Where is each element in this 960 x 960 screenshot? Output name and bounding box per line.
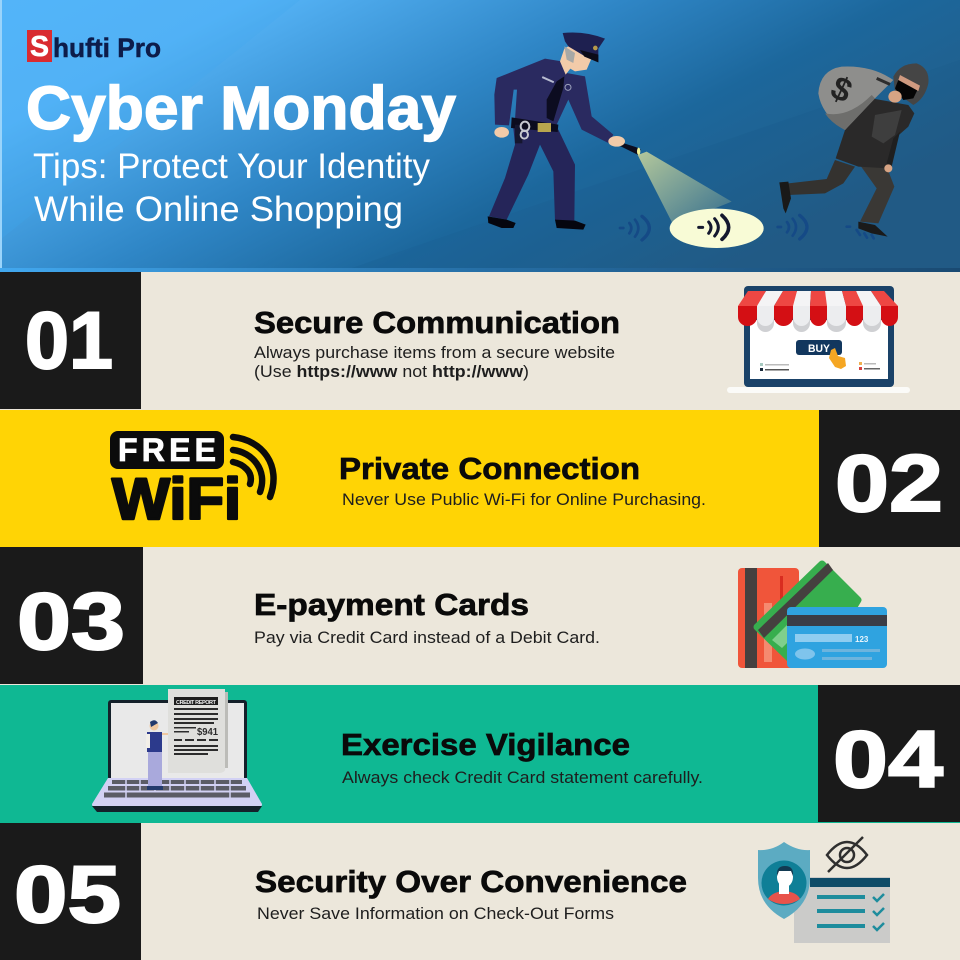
heading: Private Connection xyxy=(339,451,640,486)
description xyxy=(254,344,615,381)
description: (Use https://www not http://www ) xyxy=(254,363,529,381)
description: Never Use Public Wi-Fi for Online Purchasing. xyxy=(342,491,706,509)
number 05: 05 xyxy=(14,850,121,940)
number 01 xyxy=(0,272,141,409)
panel: tip 02 xyxy=(0,410,960,547)
heading: E-payment Cards xyxy=(254,587,529,622)
panel: tip 05 xyxy=(0,823,960,960)
logo: Shufti Pro: S xyxy=(30,31,49,63)
title: Cyber Monday xyxy=(26,74,456,142)
panel: tip 03 xyxy=(0,547,960,685)
icon: flashlight xyxy=(620,143,641,155)
icon: payment cards: 123 xyxy=(855,635,869,644)
number 04: 04 xyxy=(833,715,943,805)
icon: laptop with credit report: $941 xyxy=(197,727,218,738)
icon: wifi signal right xyxy=(778,215,807,239)
number 05 xyxy=(0,823,141,960)
panel: header banner xyxy=(0,0,960,272)
heading: Security Over Convenience xyxy=(255,864,687,899)
number 01: 01 xyxy=(25,296,113,386)
icon: footprints wifi xyxy=(847,227,874,238)
number 03: 03 xyxy=(17,577,125,667)
illustration: flashlight and wifi signal xyxy=(620,143,807,248)
number 03 xyxy=(0,547,143,684)
description: Never Save Information on Check-Out Forms xyxy=(257,905,614,923)
icon: laptop with credit report xyxy=(92,689,262,812)
icon: payment cards xyxy=(738,563,887,668)
description: Pay via Credit Card instead of a Debit Card. xyxy=(254,629,600,647)
icon: free wifi xyxy=(110,431,274,532)
icon: online shop laptop: BUY xyxy=(808,343,831,355)
subtitle xyxy=(33,147,430,229)
subtitle: While Online Shopping xyxy=(34,190,403,229)
description: Always purchase items from a secure website xyxy=(254,344,615,362)
icon: online shop laptop xyxy=(727,286,910,393)
number 02: 02 xyxy=(835,439,943,529)
awning xyxy=(738,291,898,332)
icon: free wifi: WiFi xyxy=(112,467,241,532)
icon: police officer xyxy=(488,32,625,230)
icon: flashlight beam xyxy=(638,152,732,225)
heading: Secure Communication xyxy=(254,305,620,340)
panel: tip 01 xyxy=(0,272,960,410)
number 02 xyxy=(819,410,960,547)
icon: wifi signal left xyxy=(620,216,649,240)
icon: free wifi: FREE xyxy=(118,432,216,468)
description: Always check Credit Card statement carefully. xyxy=(342,769,703,787)
icon: spotlight with wifi signal xyxy=(670,209,764,248)
logo: Shufti Pro: hufti Pro xyxy=(53,33,161,63)
panel: tip 04 xyxy=(0,685,960,823)
subtitle: Tips: Protect Your Identity xyxy=(33,147,430,186)
icon: thief with money bag xyxy=(779,63,929,238)
icon: thief with money bag: $ xyxy=(825,69,858,111)
heading: Exercise Vigilance xyxy=(341,727,630,762)
icon: privacy shield and form xyxy=(758,837,890,943)
number 04 xyxy=(818,685,960,822)
icon: laptop with credit report: CREDIT REPORT xyxy=(176,700,217,706)
